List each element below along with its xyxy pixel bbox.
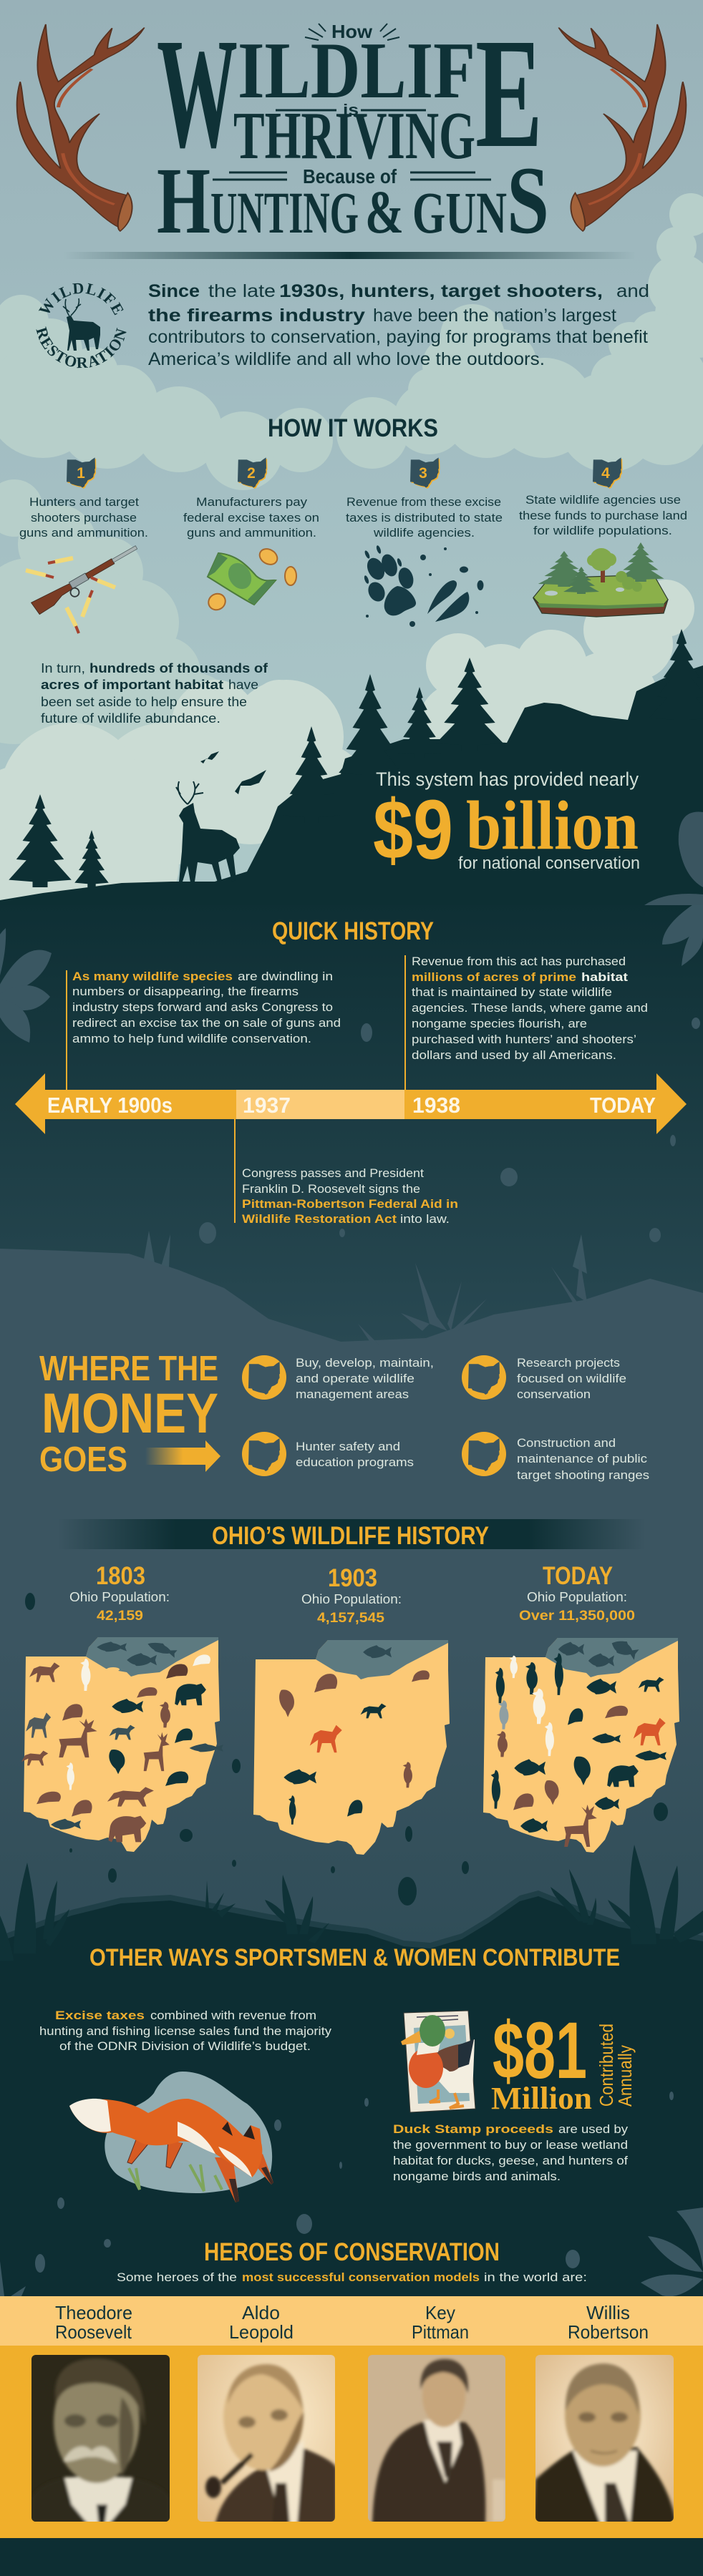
title: W: [157, 6, 238, 180]
timeline note: early 1900s: As many wildlife species: [72, 970, 233, 983]
title: ILDLIF: [238, 26, 475, 115]
timeline arrow: [15, 1073, 687, 1134]
item: shooting ranges: [462, 1432, 649, 1482]
text block: duck stamp proceeds: Duck Stamp proceeds: [393, 2122, 553, 2136]
item: management areas: [242, 1355, 434, 1401]
callout: nearly 9 billion: billion: [466, 787, 639, 864]
panel: heroes names band: Aldo: [242, 2302, 280, 2323]
background: upper clouds: [0, 193, 703, 773]
step 2: 2: [247, 465, 256, 482]
item: research projects: conservation: [517, 1387, 591, 1401]
text block: excise taxes: [39, 2009, 332, 2053]
map column: today: Ohio Population:: [527, 1590, 627, 1604]
item: management areas: Buy, develop, maintain,: [296, 1356, 434, 1370]
step 2: guns and ammunition.: [187, 526, 316, 540]
text block: heroes intro: most successful conservation models: [242, 2270, 480, 2284]
text block: intro: the firearms industry: [148, 306, 365, 326]
timeline note: 1938: dollars and used by all Americans.: [412, 1048, 616, 1062]
text block: intro: contributors to conservation, paying for programs that benefit: [148, 327, 648, 347]
callout: nearly 9 billion: [373, 769, 640, 877]
title: [157, 6, 549, 254]
text block: duck stamp proceeds: are used by: [558, 2122, 629, 2136]
title: Because of: [303, 165, 397, 187]
title: S: [507, 147, 549, 254]
logo: Wildlife Restoration seal: WILDLIFE: [39, 283, 123, 315]
icon: land block with trees: [533, 542, 668, 617]
timeline note: 1938: nongame species flourish, are: [412, 1017, 587, 1030]
stat: 81 million contributed annually: Annually: [614, 2045, 636, 2107]
title: &: [365, 177, 404, 246]
heading: other ways: OTHER WAYS SPORTSMEN & WOMEN CONTRIBUTE: [89, 1944, 620, 1971]
text block: intro: and: [616, 281, 649, 301]
item: hunter safety: Hunter safety and: [296, 1440, 400, 1453]
heading: where the money goes: MONEY: [42, 1381, 218, 1445]
timeline note: 1938: agencies. These lands, where game and: [412, 1001, 648, 1015]
callout: nearly 9 billion: for national conservation: [458, 854, 640, 873]
title: is: [343, 101, 359, 119]
timeline note: 1938: purchased with hunters’ and shooters’: [412, 1033, 636, 1046]
step 3: [346, 457, 503, 540]
step 3: wildlife agencies.: [373, 526, 475, 540]
heading: where the money goes: [39, 1350, 218, 1479]
portrait: Key Pittman: [368, 2355, 505, 2526]
step 4: [519, 457, 687, 537]
title: THRIVING: [233, 99, 475, 173]
text block: heroes intro: in the world are:: [484, 2270, 587, 2284]
text block: intro: 1930s, hunters, target shooters,: [279, 281, 603, 301]
icon: right antler: [558, 24, 687, 231]
map column: today: Over 11,350,000: [519, 1609, 635, 1624]
heading: how it works: HOW IT WORKS: [268, 414, 438, 442]
arrow: money goes: [145, 1440, 220, 1472]
timeline arrow: EARLY 1900s: [47, 1093, 173, 1118]
heading: quick history: QUICK HISTORY: [272, 917, 434, 945]
forest silhouette: [0, 629, 703, 905]
text block: intro: America’s wildlife and all who love the outdoors.: [148, 349, 545, 369]
text block: in turn: hundreds of thousands of: [89, 661, 268, 675]
panel: heroes portraits band: [0, 2346, 703, 2538]
step 4: these funds to purchase land: [519, 509, 687, 522]
icon: rifle and bullets: [26, 543, 142, 633]
text block: in turn: have: [228, 678, 258, 692]
map column: 1803: 1803: [96, 1562, 145, 1590]
icon: left antler: [16, 24, 145, 231]
text block: duck stamp proceeds: [393, 2122, 629, 2183]
leaf beside billion: [644, 812, 703, 905]
deer silhouette: [176, 781, 240, 882]
item: research projects: Research projects: [517, 1356, 620, 1370]
timeline note: early 1900s: ammo to help fund wildlife conservation.: [72, 1032, 311, 1045]
item: research projects: focused on wildlife: [517, 1372, 626, 1385]
decorative leaves and pebbles: [0, 898, 703, 1274]
map column: today: [483, 1562, 679, 1853]
map column: 1803: [21, 1562, 223, 1852]
timeline note: 1937: into law.: [400, 1212, 450, 1226]
timeline note: early 1900s: numbers or disappearing, the firearms: [72, 985, 299, 998]
title divider: [63, 252, 636, 259]
text block: duck stamp proceeds: habitat for ducks, geese, and hunters of: [393, 2154, 628, 2167]
step 3: 3: [419, 465, 427, 482]
map column: 1803: Ohio Population:: [69, 1590, 170, 1604]
text block: excise taxes: of the ODNR Division of Wildlife’s budget.: [59, 2039, 311, 2053]
text block: excise taxes: hunting and fishing license sales fund the majority: [39, 2024, 332, 2038]
step 4: State wildlife agencies use: [525, 493, 681, 507]
panel: heroes names band: Pittman: [412, 2321, 469, 2343]
portrait: Aldo Leopold: [198, 2355, 336, 2526]
text block: in turn: acres of important habitat: [41, 678, 223, 692]
timeline note: 1938: millions of acres of prime: [412, 970, 576, 984]
text block: excise taxes: Excise taxes: [55, 2009, 145, 2022]
timeline note: 1937: Pittman-Robertson Federal Aid in: [242, 1197, 458, 1211]
item: management areas: and operate wildlife: [296, 1372, 414, 1385]
text block: intro: Since: [148, 281, 200, 301]
item: shooting ranges: Construction and: [517, 1436, 616, 1450]
timeline note: early 1900s: [66, 970, 341, 1091]
text block: heroes intro: Some heroes of the: [117, 2270, 237, 2284]
panel: heroes names band: Willis: [586, 2302, 630, 2323]
timeline note: 1937: Congress passes and President: [242, 1166, 424, 1180]
birds: [200, 751, 266, 794]
timeline note: early 1900s: redirect an excise tax the on sale of guns and: [72, 1016, 341, 1030]
title: UNTING: [210, 180, 359, 245]
background: lower hills soft edge: [0, 1890, 703, 1975]
panel: heroes names band: Theodore: [55, 2302, 132, 2323]
step 2: Manufacturers pay: [196, 495, 308, 509]
grass blades: [0, 1593, 703, 1961]
timeline arrow: 1938: [412, 1093, 460, 1118]
logo: Wildlife Restoration seal: RESTORATION: [36, 326, 127, 368]
callout: nearly 9 billion: $9: [373, 783, 453, 877]
text block: excise taxes: combined with revenue from: [150, 2009, 316, 2022]
portrait: Willis Robertson: [533, 2355, 677, 2526]
map column: 1903: 4,157,545: [317, 1611, 384, 1626]
grass on hill: [358, 1259, 587, 1345]
map column: 1903: [253, 1564, 450, 1855]
step 1: [19, 457, 148, 540]
callout: nearly 9 billion: This system has provided nearly: [376, 769, 639, 790]
text block: in turn: In turn,: [41, 661, 85, 675]
map column: 1903: 1903: [328, 1564, 377, 1592]
timeline note: 1938: that is maintained by state wildlife: [412, 985, 612, 999]
step 1: guns and ammunition.: [19, 526, 148, 540]
timeline note: 1938: Revenue from this act has purchased: [412, 955, 626, 968]
icon: duck stamp: [401, 2011, 475, 2112]
stat: 81 million contributed annually: Contributed: [596, 2024, 617, 2107]
background: dark section gradient: [0, 902, 703, 1360]
heading: where the money goes: GOES: [39, 1440, 127, 1479]
panel: heroes names band: Roosevelt: [55, 2321, 132, 2343]
item: hunter safety: education programs: [296, 1455, 414, 1469]
step 4: for wildlife populations.: [533, 524, 672, 537]
item: management areas: management areas: [296, 1387, 409, 1401]
text block: intro: have been the nation’s largest: [373, 306, 616, 326]
panel: heroes names band: Leopold: [229, 2321, 294, 2343]
timeline arrow: 1937: [243, 1093, 291, 1118]
heading banner: Ohio's wildlife history: [58, 1519, 646, 1550]
step 1: 1: [77, 465, 85, 482]
icon: money and coins: [205, 546, 296, 613]
timeline note: 1937: Wildlife Restoration Act: [242, 1212, 397, 1226]
icon: animal tracks: [364, 545, 484, 627]
timeline note: 1938: habitat: [581, 970, 628, 984]
timeline note: early 1900s: are dwindling in: [238, 970, 333, 983]
map column: today: TODAY: [543, 1562, 613, 1590]
decorative pebbles and leaves lower: [0, 2092, 703, 2296]
text block: duck stamp proceeds: the government to buy or lease wetland: [393, 2138, 628, 2152]
timeline note: 1938: [404, 955, 648, 1091]
timeline note: 1937: [234, 1119, 458, 1226]
background: hill: [0, 1249, 703, 1961]
text block: intro: the late: [208, 281, 276, 301]
step 3: Revenue from these excise: [346, 495, 501, 509]
map: Ohio 1803: [21, 1637, 223, 1852]
heading: heroes of conservation: HEROES OF CONSERVATION: [204, 2238, 500, 2266]
panel: heroes names band: Key: [425, 2302, 455, 2323]
timeline arrow: TODAY: [590, 1093, 656, 1118]
heading banner: Ohio's wildlife history: OHIO’S WILDLIFE HISTORY: [212, 1522, 489, 1550]
item: shooting ranges: target shooting ranges: [517, 1468, 649, 1482]
title: H: [157, 147, 210, 253]
step 4: 4: [601, 465, 610, 482]
text block: in turn: [41, 661, 268, 726]
stat: 81 million contributed annually: Million: [491, 2081, 592, 2116]
stat: 81 million contributed annually: $81: [493, 2006, 587, 2095]
map: Ohio today: [483, 1636, 679, 1853]
icon: fox: [69, 2072, 273, 2202]
item: shooting ranges: maintenance of public: [517, 1452, 648, 1465]
panel: heroes names band: Robertson: [568, 2321, 649, 2343]
background: lower dark hills: [0, 1896, 703, 2576]
text block: heroes intro: [117, 2270, 587, 2284]
step 2: [183, 457, 319, 540]
portrait: Theodore Roosevelt: [31, 2355, 170, 2526]
text block: in turn: been set aside to help ensure the: [41, 695, 247, 709]
text block: in turn: future of wildlife abundance.: [41, 711, 220, 726]
item: hunter safety: [242, 1432, 414, 1476]
title: GUN: [412, 180, 507, 245]
step 3: taxes is distributed to state: [346, 511, 503, 525]
title: How: [331, 21, 373, 42]
panel: heroes names band: [0, 2296, 703, 2346]
step 1: Hunters and target: [29, 495, 139, 509]
map: Ohio 1903: [253, 1640, 450, 1855]
timeline note: 1937: Franklin D. Roosevelt signs the: [242, 1182, 420, 1196]
map column: 1903: Ohio Population:: [301, 1592, 402, 1606]
item: research projects: [462, 1355, 626, 1401]
logo: Wildlife Restoration seal: [36, 283, 127, 368]
title: E: [475, 6, 543, 180]
map column: 1803: 42,159: [97, 1609, 143, 1624]
heading: where the money goes: WHERE THE: [39, 1350, 218, 1388]
text block: duck stamp proceeds: nongame birds and animals.: [393, 2170, 561, 2183]
step 1: shooters purchase: [31, 511, 137, 525]
background: sky: [0, 0, 703, 909]
text block: intro: [148, 281, 649, 369]
background: lower clouds: [0, 580, 694, 930]
step 2: federal excise taxes on: [183, 511, 319, 525]
timeline note: early 1900s: industry steps forward and asks Congress to: [72, 1000, 333, 1014]
